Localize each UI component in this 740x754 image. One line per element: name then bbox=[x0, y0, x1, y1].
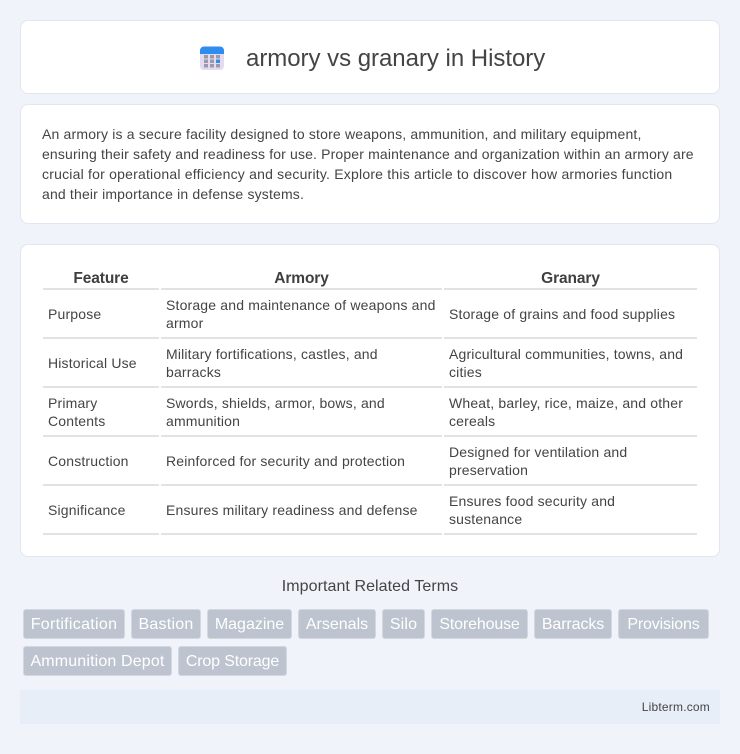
related terms tags: Barracks bbox=[542, 616, 604, 633]
comparison table bbox=[43, 270, 697, 535]
row: historical use: Agricultural communities, towns, and bbox=[449, 346, 683, 362]
row: purpose bbox=[43, 297, 697, 339]
row: significance: Ensures food security and bbox=[449, 493, 615, 509]
row: construction bbox=[43, 444, 697, 486]
row: primary contents: Contents bbox=[48, 413, 105, 429]
row: purpose: Storage of grains and food supplies bbox=[449, 306, 675, 322]
related terms tags: Magazine bbox=[215, 616, 284, 633]
row: significance: sustenance bbox=[449, 511, 522, 527]
table card bbox=[20, 244, 720, 557]
header card bbox=[20, 20, 720, 94]
intro paragraph bbox=[42, 126, 694, 202]
row: primary contents: ammunition bbox=[166, 413, 240, 429]
table header row: Granary bbox=[541, 270, 600, 287]
intro paragraph: An armory is a secure facility designed to store weapons, ammunition, and military equipment, bbox=[42, 126, 642, 142]
table header row bbox=[43, 270, 697, 290]
row: construction: preservation bbox=[449, 462, 528, 478]
related terms heading: Important Related Terms bbox=[282, 578, 458, 595]
row: historical use: barracks bbox=[166, 364, 221, 380]
table header row: Armory bbox=[274, 270, 329, 287]
related terms tags: Storehouse bbox=[439, 616, 520, 633]
related terms tags bbox=[23, 609, 709, 676]
row: primary contents: cereals bbox=[449, 413, 495, 429]
intro paragraph: ensuring their safety and readiness for use. Proper maintenance and organization within an armory are bbox=[42, 146, 694, 162]
row: historical use: Military fortifications, castles, and bbox=[166, 346, 378, 362]
icon: calendar bbox=[200, 46, 224, 70]
row: purpose: Purpose bbox=[48, 306, 101, 322]
row: primary contents: Swords, shields, armor, bows, and bbox=[166, 395, 385, 411]
row: purpose: Storage and maintenance of weapons and bbox=[166, 297, 436, 313]
row: historical use: cities bbox=[449, 364, 482, 380]
related terms tags: Crop Storage bbox=[186, 653, 279, 670]
row: historical use: Historical Use bbox=[48, 355, 137, 371]
related terms tags: Provisions bbox=[627, 616, 700, 633]
intro paragraph: and their importance in defense systems. bbox=[42, 186, 304, 202]
related terms tags: Silo bbox=[390, 616, 417, 633]
row: primary contents: Wheat, barley, rice, maize, and other bbox=[449, 395, 683, 411]
row: significance: Ensures military readiness and defense bbox=[166, 502, 418, 518]
related terms tags: Fortification bbox=[31, 616, 117, 633]
intro text card bbox=[20, 104, 720, 224]
title: armory vs granary in History bbox=[246, 45, 545, 72]
row: primary contents: Primary bbox=[48, 395, 97, 411]
related terms tags: Bastion bbox=[138, 616, 194, 633]
intro paragraph: crucial for operational efficiency and security. Explore this article to discover how armories function bbox=[42, 166, 672, 182]
row: purpose: armor bbox=[166, 315, 203, 331]
row: significance bbox=[43, 493, 697, 535]
row: construction: Designed for ventilation and bbox=[449, 444, 627, 460]
row: primary contents bbox=[43, 395, 697, 437]
row: construction: Construction bbox=[48, 453, 129, 469]
related terms tags: Ammunition Depot bbox=[30, 653, 165, 670]
table header row: Feature bbox=[73, 270, 129, 287]
row: construction: Reinforced for security and protection bbox=[166, 453, 405, 469]
related terms tags: Arsenals bbox=[306, 616, 368, 633]
row: significance: Significance bbox=[48, 502, 126, 518]
footer bar bbox=[20, 690, 720, 724]
row: historical use bbox=[43, 346, 697, 388]
footer credit: Libterm.com bbox=[642, 700, 710, 714]
